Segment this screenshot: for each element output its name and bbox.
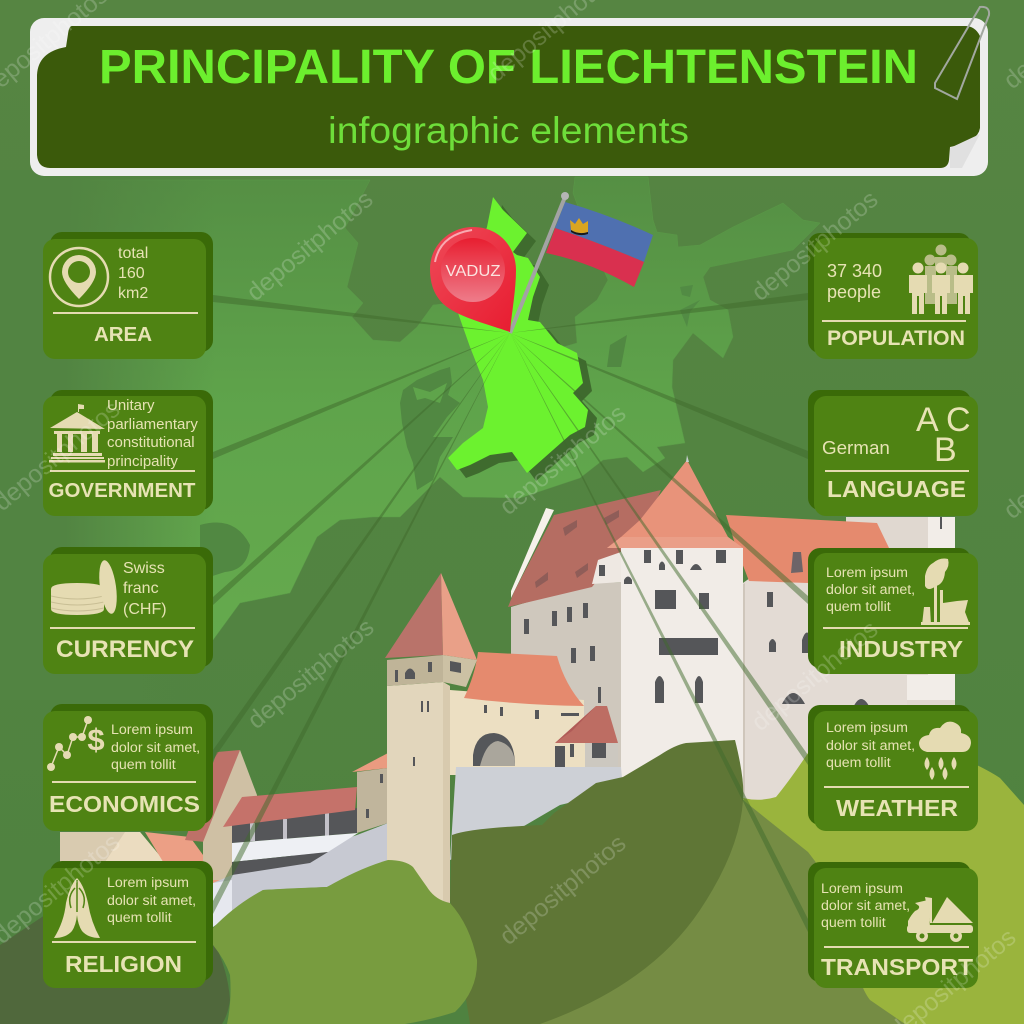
castle: main white tower [607,455,743,808]
panel: transport: dolor sit amet, [821,898,910,914]
panel: language: LANGUAGE [827,476,966,502]
panel: government: principality [107,453,178,470]
panel: language: German [822,437,890,458]
panel: currency: Swiss [123,560,165,577]
panel: industry: INDUSTRY [839,636,963,662]
panel: transport [808,862,978,988]
panel: government: Unitary [107,397,155,414]
panel: weather: Lorem ipsum [826,720,908,736]
panel: currency: (CHF) [123,601,167,618]
icon: trend line with dollar sign: $ [87,722,105,757]
icon: letters A B C: B [934,431,957,469]
icon: letters A B C: A [916,401,939,439]
panel: transport: Lorem ipsum [821,881,903,897]
flag of Liechtenstein on pole [510,192,653,333]
icon: government building [49,404,105,462]
title: PRINCIPALITY OF LIECHTENSTEIN [99,40,918,94]
icon: coins [51,559,120,615]
icon: paper clip [935,7,989,99]
panel: government: parliamentary [107,416,198,433]
panel: weather: dolor sit amet, [826,738,915,754]
icon: rain cloud [919,722,971,780]
map pin: Vaduz [430,227,516,332]
panel: religion: dolor sit amet, [107,893,196,909]
icon: factory with smoke [921,558,970,625]
panel: government [43,390,213,516]
panel: currency: franc [123,580,159,597]
panel: currency [43,547,213,674]
panel: industry: dolor sit amet, [826,582,915,598]
panel: religion: Lorem ipsum [107,875,189,891]
castle: left wing with roof [508,490,661,790]
panel: religion: RELIGION [65,951,182,977]
radial connector lines [213,293,808,932]
panel: industry: Lorem ipsum [826,565,908,581]
castle: gate tower [385,573,477,904]
icon: location pin in circle [50,248,108,306]
castle: small gabled annex [450,706,623,860]
panel: religion [43,861,213,988]
icon: group of people [909,244,973,314]
panel: area [43,232,213,359]
panel: economics: Lorem ipsum [111,722,193,738]
panel: weather: quem tollit [826,755,891,771]
panel: economics: ECONOMICS [49,791,200,817]
header banner [30,7,989,176]
panel: weather: WEATHER [836,795,958,821]
castle: small tower [352,753,388,833]
panel: area: AREA [94,323,152,346]
panel: population [808,233,978,359]
panel: government: constitutional [107,434,195,451]
castle: left outbuilding [60,750,258,895]
panel: area: 160 [118,265,145,282]
stock photo watermarks: depositphotos [746,185,883,307]
icon: praying hands [54,878,100,938]
panel: population: POPULATION [827,327,965,350]
panel: weather [808,705,978,831]
panel: industry [808,548,978,674]
castle: right wing [726,515,955,800]
panel: government: GOVERNMENT [49,479,196,502]
map pin: Vaduz: VADUZ [446,263,500,280]
subtitle: infographic elements [328,110,689,151]
panel: area: km2 [118,285,148,302]
icon: trend line with dollar sign [47,716,105,771]
hills [0,740,1024,1024]
panel: transport: TRANSPORT [821,954,973,980]
panel: economics: dolor sit amet, [111,740,200,756]
stock photo watermarks: depositphotos [494,399,631,521]
map: Liechtenstein country shape [448,197,597,481]
icon: letters A B C [916,401,971,469]
icon: dump truck [907,897,973,942]
stock photo watermarks: depositphotos [242,613,379,735]
panel: economics: quem tollit [111,757,176,773]
panel: transport: quem tollit [821,915,886,931]
world map backdrop [0,170,820,700]
panel: religion: quem tollit [107,910,172,926]
stock photo watermarks: depositphotos [746,615,883,737]
panel: economics [43,704,213,831]
panel: population: people [827,282,881,302]
panel: area: total [118,245,148,262]
stock photo watermarks: depositphotos [494,829,631,951]
castle: gatehouse wall [450,652,584,775]
panel: population: 37 340 [827,261,882,281]
castle: covered gallery [213,787,388,927]
stock photo watermarks: depositphotos [241,185,378,307]
panel: industry: quem tollit [826,599,891,615]
icon: letters A B C: C [946,401,971,439]
panel: language [808,390,978,516]
panel: currency: CURRENCY [56,636,194,663]
